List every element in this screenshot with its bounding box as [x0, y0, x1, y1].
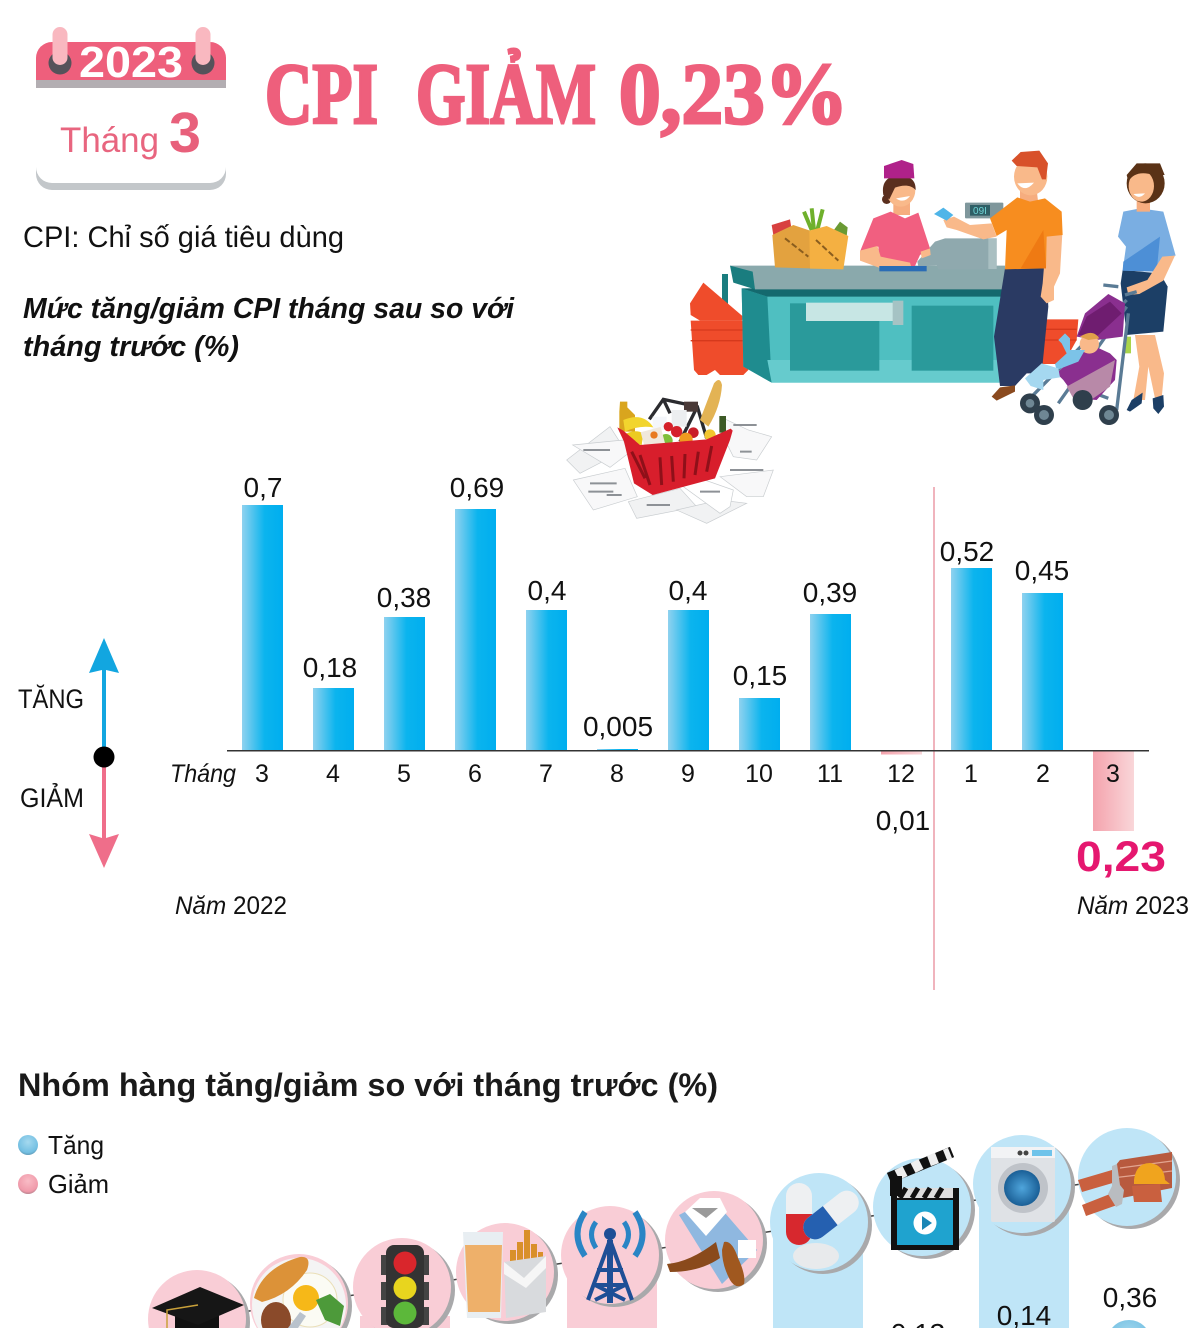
negative bars: [881, 751, 1134, 831]
value labels: 0,15: [733, 660, 787, 691]
value labels: 0,7: [244, 472, 282, 503]
oil bottle: [619, 402, 635, 432]
group: telecommunications: [561, 1206, 663, 1307]
baby stroller: [1020, 285, 1137, 425]
title: [265, 45, 848, 142]
bread: [700, 380, 722, 427]
month labels: 3: [255, 760, 269, 788]
goods groups chart: [148, 1128, 1180, 1328]
red basket: [617, 427, 733, 495]
group: culture and entertainment: [873, 1152, 975, 1259]
month labels: 2: [1036, 760, 1050, 788]
CPI definition: CPI: Chỉ số giá tiêu dùng: [23, 221, 344, 254]
group: apparel: [665, 1191, 767, 1292]
trend line: [197, 1177, 1127, 1319]
value labels: 0,01: [876, 805, 930, 836]
month labels: 8: [610, 760, 624, 788]
illustration: grocery basket on receipts: [567, 380, 773, 523]
increase/decrease arrow key: [18, 638, 119, 868]
year label 2023: Năm 2023: [1077, 892, 1189, 920]
group: beverages and tobacco: [456, 1223, 558, 1324]
red baskets left: [690, 274, 748, 375]
axis: [227, 750, 1149, 752]
receipt print marks: [583, 425, 763, 505]
value labels: [244, 472, 1069, 836]
title: 0,23%: [619, 45, 848, 142]
group: food: [250, 1254, 352, 1328]
group: education: [148, 1270, 250, 1328]
cashier: [860, 160, 931, 271]
chart: monthly CPI change: [170, 472, 1189, 990]
cash register: 09I: [973, 206, 987, 217]
year divider: [933, 487, 935, 990]
year label 2022: Năm 2022: [175, 892, 287, 920]
month labels: 6: [468, 760, 482, 788]
month labels: 3: [1106, 760, 1120, 788]
month labels: 9: [681, 760, 695, 788]
group: medicine: [770, 1173, 872, 1274]
blue indicator ball: [1107, 1320, 1151, 1328]
month labels: 11: [817, 760, 843, 788]
month labels: 7: [539, 760, 553, 788]
value labels: 0,005: [583, 711, 653, 742]
calendar badge: [36, 27, 226, 190]
shopping boxes: [772, 208, 848, 269]
month labels: Tháng: [170, 760, 236, 788]
fruits and groceries: [623, 402, 726, 451]
label: decrease: GIẢM: [20, 781, 84, 813]
bars: [242, 505, 1063, 751]
legend: Tăng: [48, 1130, 104, 1160]
value labels: 0,39: [803, 577, 857, 608]
value labels: 0,4: [528, 575, 566, 606]
month labels: 12: [887, 760, 915, 788]
value labels: 0,38: [377, 582, 431, 613]
value labels: 0,45: [1015, 555, 1069, 586]
calendar month label: Tháng: [60, 121, 159, 160]
chart subtitle: [23, 293, 515, 363]
value labels: 0,52: [940, 536, 994, 567]
value labels: 0,4: [669, 575, 707, 606]
section heading: Nhóm hàng tăng/giảm so với tháng trước (%): [18, 1067, 718, 1103]
male customer: [934, 151, 1063, 401]
label: increase: TĂNG: [18, 684, 84, 714]
checkout counter: [730, 266, 1005, 383]
illustration: supermarket checkout: [690, 151, 1176, 425]
chart subtitle: Mức tăng/giảm CPI tháng sau so với: [23, 293, 515, 325]
group: household appliances: [973, 1135, 1075, 1236]
month labels: 10: [745, 760, 773, 788]
red baskets right: [1016, 319, 1078, 364]
group: traffic: [353, 1238, 455, 1328]
value 0,36: 0,36: [1103, 1282, 1157, 1313]
legend: [18, 1130, 109, 1199]
month labels: 1: [964, 760, 978, 788]
month labels: 5: [397, 760, 411, 788]
legend: Giảm: [48, 1169, 109, 1199]
highlighted value: 0,23: [1076, 833, 1166, 881]
title: GIẢM: [416, 45, 596, 142]
chart subtitle: tháng trước (%): [23, 331, 239, 363]
decrease arrow: [89, 760, 119, 868]
month labels: 4: [326, 760, 340, 788]
calendar year: 2023: [79, 38, 183, 87]
title: CPI: [265, 45, 378, 142]
value labels: 0,18: [303, 652, 357, 683]
female customer: [1118, 163, 1176, 414]
receipts: [567, 417, 773, 523]
value labels: 0,69: [450, 472, 504, 503]
month labels: [170, 760, 1120, 788]
calendar month number: 3: [169, 101, 201, 165]
basket handles: [649, 399, 707, 442]
cash register: [917, 203, 1003, 269]
increase arrow: [89, 638, 119, 750]
group: housing and construction materials: [1078, 1128, 1180, 1229]
column backgrounds: [360, 1184, 1069, 1328]
